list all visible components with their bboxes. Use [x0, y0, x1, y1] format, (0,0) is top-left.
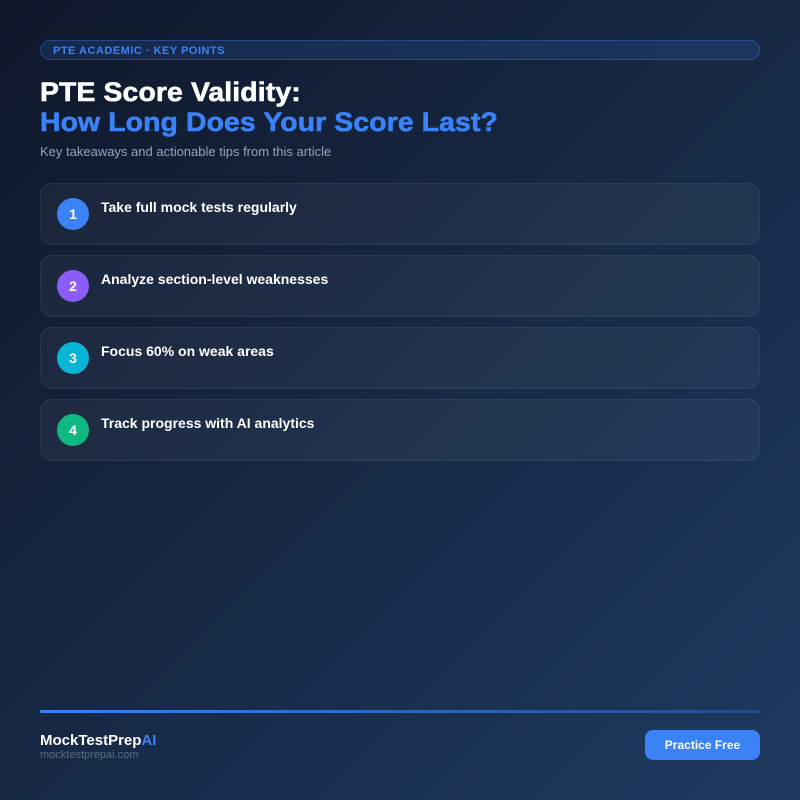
icon: number 3 — [57, 342, 89, 374]
panel: tip 4 — [40, 399, 760, 461]
icon: number 1 — [57, 198, 89, 230]
tip 1 text: Take full mock tests regularly — [101, 199, 297, 215]
icon: number 2 — [57, 270, 89, 302]
icon: number 2: 2 — [69, 278, 77, 294]
icon: number 1: 1 — [69, 206, 77, 222]
icon: number 3: 3 — [69, 350, 77, 366]
brand name: MockTestPrepAI — [40, 732, 156, 749]
panel: tip 3 — [40, 327, 760, 389]
panel: tip 2 — [40, 255, 760, 317]
badge: PTE ACADEMIC · KEY POINTS — [53, 45, 225, 57]
tip 3 text: Focus 60% on weak areas — [101, 343, 274, 359]
title — [40, 77, 498, 137]
title: How Long Does Your Score Last? — [40, 107, 498, 137]
badge — [40, 40, 760, 60]
panel: tip 1 — [40, 183, 760, 245]
tip 2 text: Analyze section-level weaknesses — [101, 271, 328, 287]
icon: number 4: 4 — [69, 422, 77, 438]
website url: mocktestprepai.com — [40, 748, 138, 760]
icon: number 4 — [57, 414, 89, 446]
call to action button — [645, 730, 760, 760]
call to action button: Practice Free — [665, 738, 740, 752]
subtitle: Key takeaways and actionable tips from this article — [40, 144, 331, 159]
tip 4 text: Track progress with AI analytics — [101, 415, 314, 431]
title: PTE Score Validity: — [40, 77, 301, 107]
